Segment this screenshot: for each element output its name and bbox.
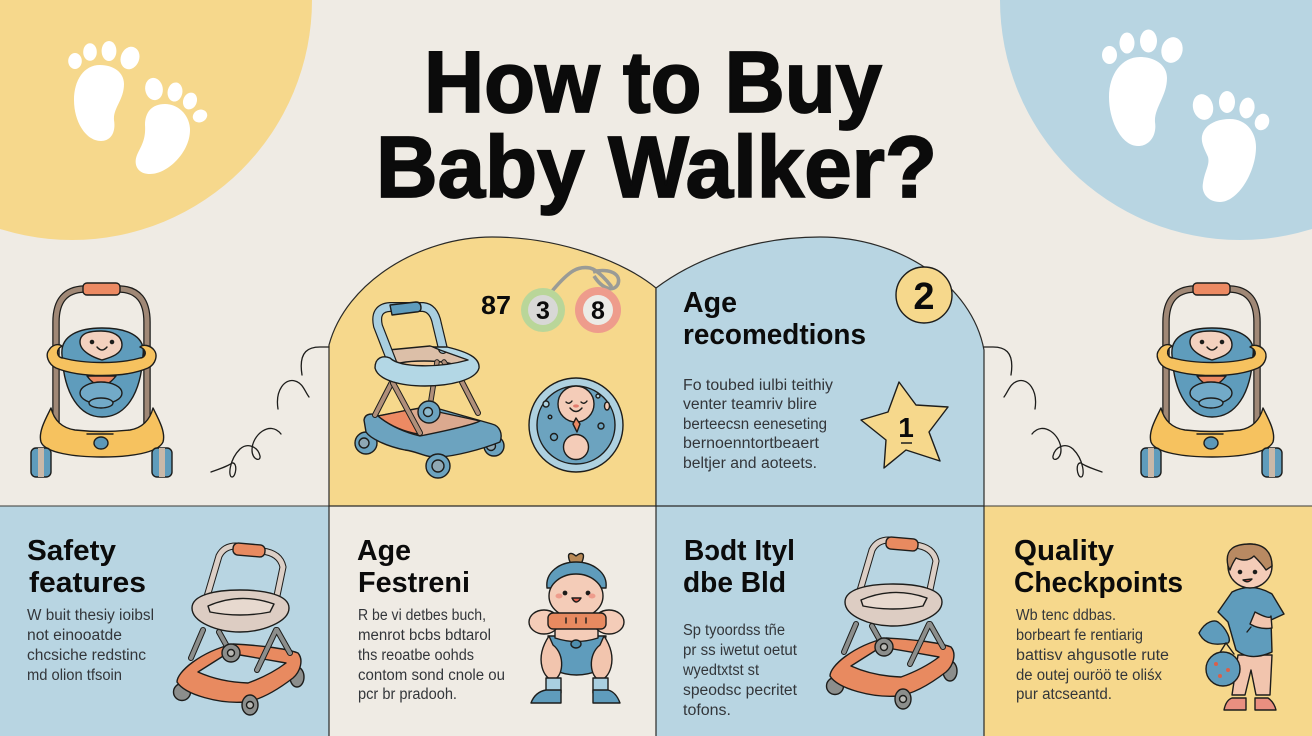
number 87: 87 [481,290,511,320]
text block: quality checkpoints body: battisv ahgusotle rute [1016,647,1169,664]
heading: age recommendations: Age [683,287,737,319]
heading: age festreni: Age [357,535,411,567]
text block: quality checkpoints body: Wb tenc ddbas. [1016,607,1116,624]
text block: safety features body: not einooatde [27,627,122,644]
heading: safety features: Safety [27,535,116,567]
heading: bodt ityl: dbe Bld [683,567,786,599]
right squiggle arrow [984,347,1102,477]
heading: safety features [27,535,146,599]
text block: age festreni body: contom sond cnole ou [358,667,505,684]
text block: bodt ityl body: wyedtxtst st [682,662,760,679]
text block: bodt ityl body: Sp tyoordss tñe [683,622,785,639]
corner circle: yellow with footprints [0,0,312,240]
text block: quality checkpoints body [1016,607,1169,703]
heading: age recommendations: recomedtions [683,319,866,351]
heading: age recommendations [683,287,866,351]
icon: toy rattle balls: 8 [591,297,605,325]
title: Baby Walker? [376,119,937,216]
icon: star with number 1: 1 [898,412,914,443]
text block: safety features body [27,607,154,684]
text block: age recommendations body: bernoenntortbeaert [683,435,820,452]
heading: bodt ityl: Bɔdt Ityl [684,535,795,567]
text block: age festreni body: R be vi detbes buch, [358,607,486,624]
icon: orange walker, safety panel [174,543,304,715]
text block: safety features body: chcsiche redstinc [27,647,146,664]
heading: quality checkpoints: Checkpoints [1014,567,1183,599]
text block: age recommendations body [683,377,833,472]
icon: toy rattle balls [521,268,621,333]
text block: bodt ityl body: speodsc pecritet [683,682,798,699]
text block: age festreni body [358,607,505,703]
text block: age festreni body: menrot bcbs bdtarol [358,627,491,644]
number badge 2 [896,267,952,323]
icon: right footprint [136,76,209,174]
text block: age festreni body: ths reoatbe oohds [358,647,474,664]
heading: age festreni: Festreni [358,567,470,599]
title: How to Buy [424,34,882,131]
text block: age recommendations body: venter teamriv blire [683,396,817,413]
text block: age festreni body: pcr br pradooh. [358,686,457,703]
icon: standing toddler [1199,544,1284,710]
text block: age recommendations body: Fo toubed iulbi teithiy [683,377,833,394]
panel: blue arch [656,237,984,506]
icon: orange walker, style panel [826,537,957,709]
icon: star with number 1 [861,382,948,468]
text block: quality checkpoints body: borbeart fe rentiarig [1016,627,1143,644]
heading: safety features: features [29,567,146,599]
text block: bodt ityl body: pr ss iwetut oetut [683,642,798,659]
text block: age recommendations body: beltjer and aoteets. [683,455,817,472]
corner circle: blue with footprints [1000,0,1312,240]
icon: left footprint [68,41,143,141]
number badge 2: 2 [913,276,935,318]
icon: left front-facing walker with baby [31,283,172,477]
icon: baby in round medallion [529,378,623,472]
text block: safety features body: md olion tfsoin [27,667,122,684]
icon: sitting baby [529,554,624,703]
panel: yellow arch [329,237,656,506]
icon: right footprint [1190,91,1272,202]
text block: bodt ityl body [682,622,798,719]
text block: quality checkpoints body: de outej ouröö te oliśx [1016,667,1162,684]
icon: toy rattle balls: 3 [536,297,550,325]
text block: age recommendations body: berteecsn eeneseting [683,416,827,433]
text block: bodt ityl body: tofons. [683,702,731,719]
icon: left footprint [1102,30,1186,146]
heading: quality checkpoints [1014,535,1183,599]
icon: blue walker in yellow arch [355,302,504,478]
text block: safety features body: W buit thesiy ioibsl [27,607,154,624]
text block: quality checkpoints body: pur atcseantd. [1016,686,1112,703]
panel: bottom row background [0,506,1312,736]
heading: bodt ityl [683,535,795,599]
heading: age festreni [357,535,470,599]
title [376,34,937,216]
heading: quality checkpoints: Quality [1014,535,1114,567]
left squiggle arrow [211,347,329,477]
icon: right front-facing walker with baby [1141,283,1282,477]
